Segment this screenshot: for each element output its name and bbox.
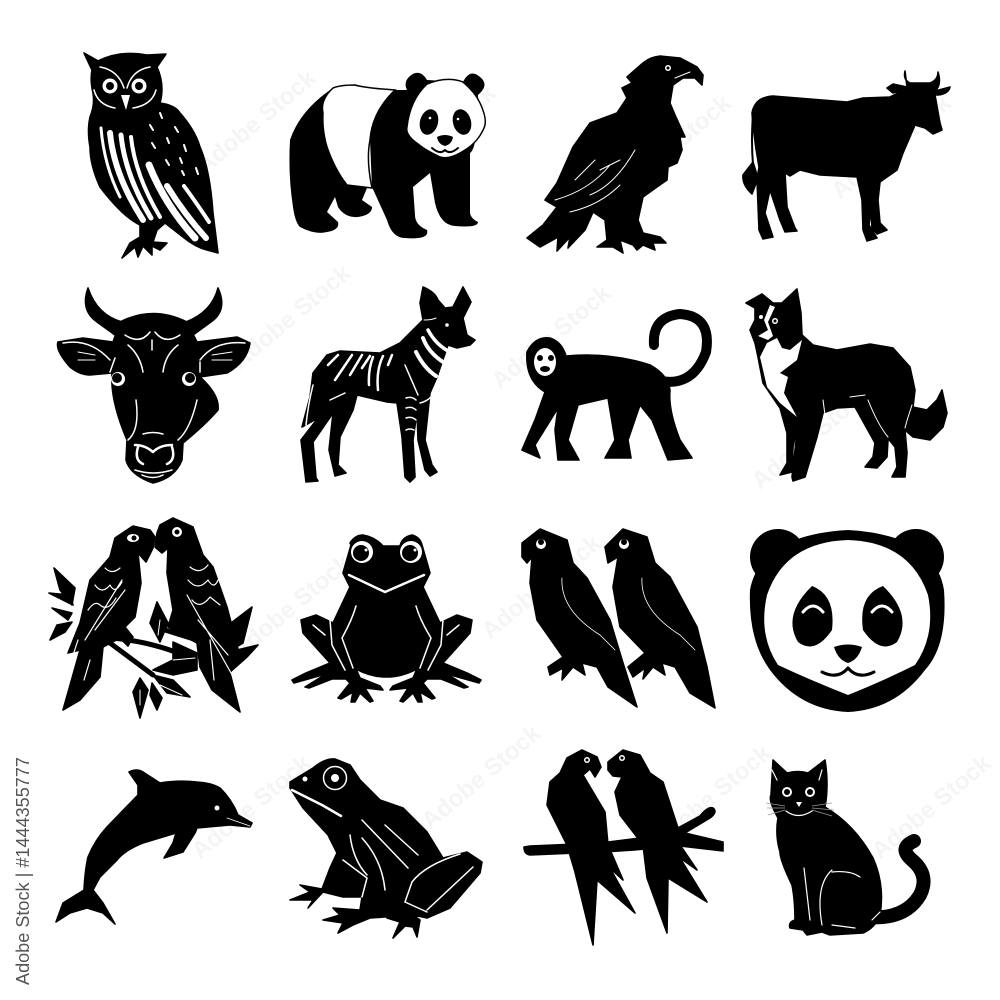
watermark text: Adobe Stock bbox=[187, 749, 317, 865]
watermark text: Adobe Stock bbox=[227, 549, 357, 665]
watermark text: Adobe Stock bbox=[227, 259, 357, 375]
icon: frog front bbox=[292, 535, 481, 702]
watermark text: Adobe Stock bbox=[372, 79, 502, 195]
icon: collie dog bbox=[746, 289, 947, 481]
icon: striped wild dog bbox=[301, 287, 475, 482]
watermark text: Adobe Stock bbox=[487, 279, 617, 395]
icon: panda face bbox=[750, 529, 945, 712]
icon: cow bbox=[743, 71, 950, 241]
watermark text: Adobe Stock bbox=[417, 719, 547, 835]
watermark text: Adobe Stock bbox=[192, 64, 322, 180]
icon: frog side bbox=[290, 759, 482, 938]
watermark text bbox=[187, 64, 997, 865]
watermark text: Adobe Stock bbox=[787, 589, 917, 705]
side stock number: Adobe Stock | #1444355777 bbox=[13, 757, 33, 985]
icon: two parrots on branch bbox=[524, 750, 723, 945]
icon: bull head bbox=[58, 288, 250, 483]
icon: dolphin bbox=[56, 770, 252, 924]
watermark text: Adobe Stock bbox=[827, 89, 957, 205]
watermark text: Adobe Stock bbox=[747, 379, 877, 495]
watermark text: Adobe Stock bbox=[647, 739, 777, 855]
icon: parrots on branch bbox=[49, 518, 258, 718]
icon: cat bbox=[766, 760, 924, 935]
icon: panda standing bbox=[289, 73, 485, 238]
watermark text: Adobe Stock bbox=[477, 529, 607, 645]
icon: owl bbox=[84, 53, 218, 258]
icon: two perched parrots bbox=[522, 529, 715, 708]
watermark text: Adobe Stock bbox=[607, 89, 737, 205]
icon: eagle bbox=[527, 56, 703, 253]
watermark text: Adobe Stock bbox=[867, 749, 997, 865]
icon: monkey bbox=[522, 314, 707, 460]
